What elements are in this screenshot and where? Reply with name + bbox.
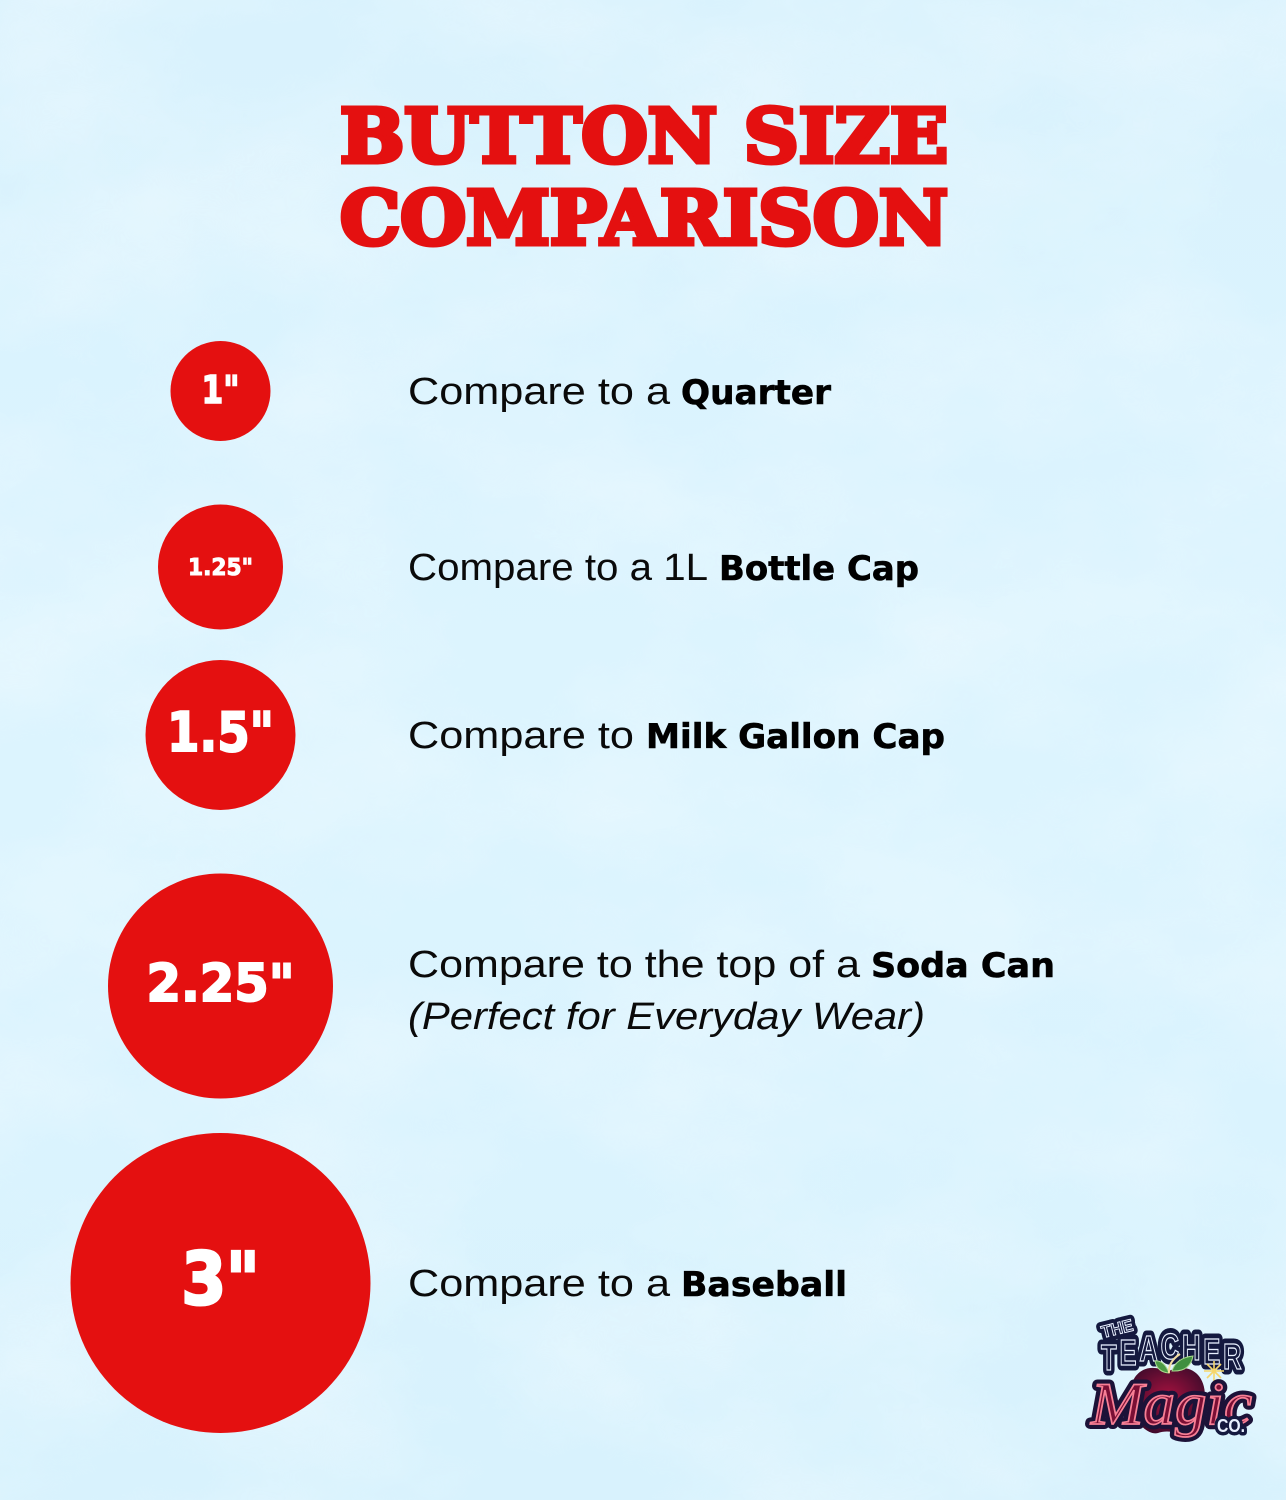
label: soda can: (Perfect for Everyday Wear) (408, 996, 925, 1038)
circle: 2.25 inch (108, 874, 333, 1098)
button row: 1 inch (170, 341, 831, 441)
logo text: magic: Magic (1090, 1371, 1252, 1437)
circle: 1 inch: 1" (202, 368, 240, 412)
label: soda can (408, 944, 1055, 1038)
circle: 3 inch: 3" (182, 1237, 260, 1321)
logo text: magic: Magic (1090, 1371, 1252, 1437)
label: milk gallon cap: Compare to (408, 715, 634, 757)
label: soda can: Compare to the top of a (408, 944, 861, 986)
label: baseball: Baseball (681, 1265, 847, 1305)
circle: 1.5 inch (146, 660, 296, 810)
circle: 1.5 inch: 1.5" (167, 701, 274, 764)
label: bottle cap: Bottle Cap (719, 549, 919, 589)
button row: 1.25 inch (158, 504, 919, 630)
label: quarter: Compare to a (408, 371, 671, 413)
circle: 1 inch (170, 341, 270, 441)
label: bottle cap: Compare to a 1L (408, 547, 708, 589)
button row: 1.5 inch (146, 660, 945, 810)
label: quarter: Quarter (681, 373, 831, 413)
leaves (1155, 1354, 1193, 1373)
button row: 3 inch (70, 1133, 847, 1433)
logo text: the: THE (1099, 1316, 1135, 1342)
circle: 1.25 inch: 1.25" (188, 555, 253, 581)
title: BUTTON SIZE (340, 94, 948, 180)
circle: 1.25 inch (158, 504, 283, 630)
title (340, 94, 948, 262)
logo text: teacher: TEACHER (1101, 1327, 1242, 1378)
button row: 2.25 inch (108, 874, 1055, 1098)
circle: 2.25 inch: 2.25" (146, 954, 294, 1014)
logo text: teacher: TEACHER (1101, 1327, 1242, 1378)
title: COMPARISON (340, 176, 948, 262)
logo: The Teacher Magic Co. (1090, 1316, 1252, 1437)
label: baseball: Compare to a (408, 1263, 671, 1305)
apple (1130, 1368, 1205, 1433)
label: milk gallon cap: Milk Gallon Cap (646, 717, 945, 757)
logo text: co: CO. (1217, 1416, 1245, 1436)
sparkle (1204, 1361, 1224, 1381)
circle: 3 inch (70, 1133, 370, 1433)
label: soda can: Soda Can (871, 946, 1055, 986)
logo text: the: THE (1099, 1316, 1135, 1342)
logo text: co: CO. (1217, 1416, 1245, 1436)
